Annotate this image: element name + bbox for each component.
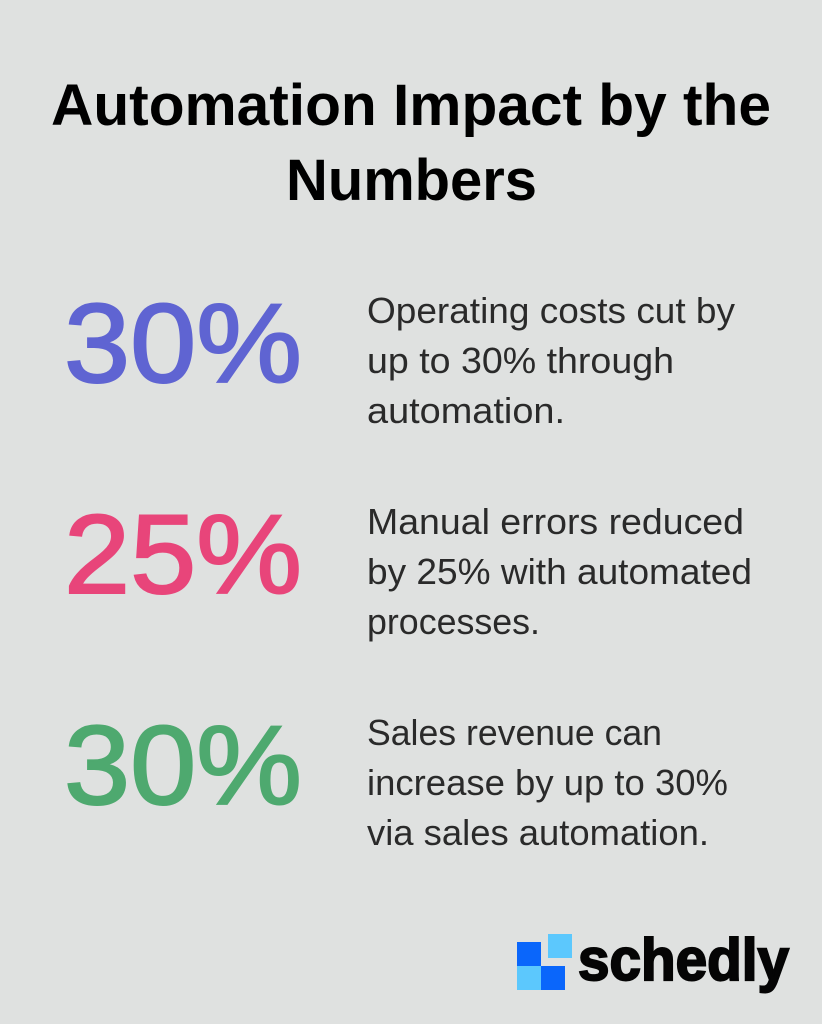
stat 2: manual errors — [64, 492, 752, 642]
title — [51, 73, 771, 213]
stat number 30% green: 30% — [64, 703, 302, 828]
stat 3 description: Sales revenue can — [367, 712, 662, 753]
stat 2 description — [367, 501, 752, 642]
stat 3 description — [367, 712, 728, 853]
stat 2 description: Manual errors reduced — [367, 501, 744, 542]
stat 1 description: up to 30% through — [367, 340, 674, 381]
icon: logo squares — [517, 934, 572, 990]
stat number 30% purple: 30% — [64, 281, 302, 406]
stat 1 description: automation. — [367, 390, 565, 431]
stat 3: sales revenue — [64, 703, 728, 853]
stat 1: operating costs — [64, 281, 735, 431]
stat 1 description — [367, 290, 735, 431]
stat 3 description: increase by up to 30% — [367, 762, 728, 803]
stat 2 description: by 25% with automated — [367, 551, 752, 592]
stat 1 description: Operating costs cut by — [367, 290, 735, 331]
stat 3 description: via sales automation. — [367, 812, 709, 853]
title: Automation Impact by the — [51, 73, 771, 138]
title: Numbers — [286, 148, 537, 213]
logo: schedly — [517, 927, 789, 993]
stat number 25% pink: 25% — [64, 492, 302, 617]
logo wordmark: schedly — [578, 927, 789, 993]
stat 2 description: processes. — [367, 601, 540, 642]
